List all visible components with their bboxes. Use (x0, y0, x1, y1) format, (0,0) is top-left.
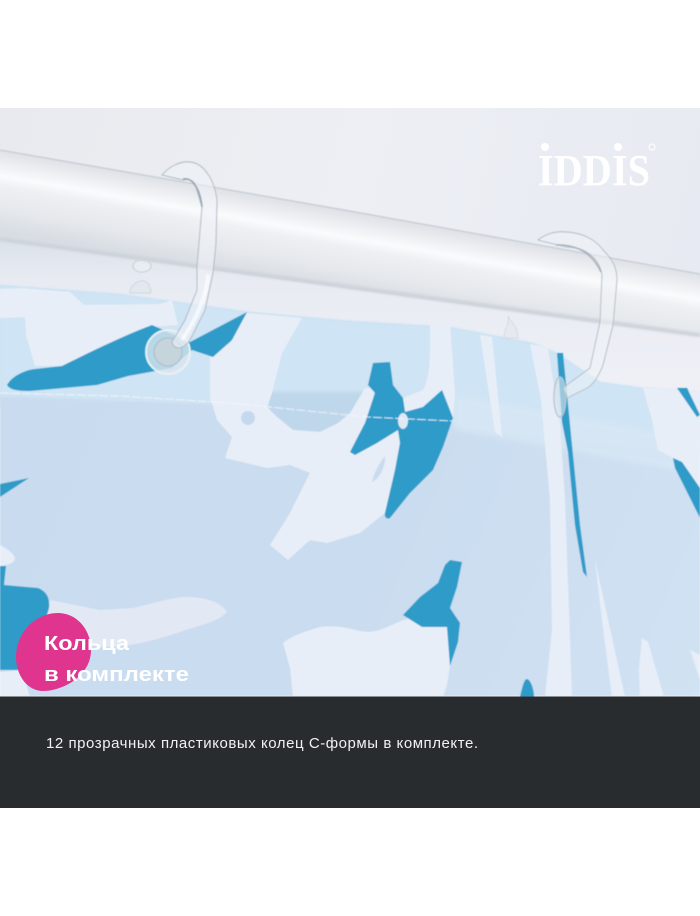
grommet (146, 330, 190, 374)
pale highlight inside butterfly (398, 413, 408, 429)
ring 2 grommet (554, 377, 566, 417)
product photo: curtain on rod (0, 108, 700, 697)
white curved band top centre (403, 323, 455, 418)
curtain fabric (0, 285, 700, 697)
clear ring 1 (146, 162, 217, 374)
upper right white area (643, 388, 700, 490)
vertical white stripe (530, 344, 572, 697)
darker hem blob (269, 392, 362, 431)
badge heading: Кольца (44, 633, 130, 655)
ring 2 inner shadow (556, 245, 601, 272)
small white shape left edge (0, 545, 15, 566)
fabric base (0, 285, 700, 696)
thin lower stripe (595, 560, 625, 697)
logo dots (541, 143, 549, 151)
caption text: 12 прозрачных пластиковых колец С-формы в комплекте. (46, 735, 478, 752)
shaded area under the rod (0, 242, 130, 262)
clear ring 2 (538, 232, 617, 417)
ring inner shadow (183, 179, 202, 207)
shower rod (0, 150, 700, 337)
teal patch lower left (0, 566, 49, 670)
narrow white stripe (480, 335, 502, 437)
registered mark (649, 144, 655, 150)
teal bottom stub (520, 679, 534, 697)
teal camouflage shapes (0, 312, 700, 697)
ring body (162, 162, 217, 348)
white camouflage shapes (0, 288, 700, 697)
badge heading: в комплекте (44, 664, 189, 686)
teal right edge (673, 458, 700, 518)
lower right white shape (639, 638, 664, 697)
white blob lower centre (283, 618, 453, 697)
caption bar background (0, 696, 700, 808)
logo wordmark: IDDIS (538, 146, 650, 195)
dark caption bar (0, 696, 700, 808)
upper lighter hem panel (4, 288, 614, 401)
teal patch lower centre (403, 560, 462, 666)
hem band right (458, 426, 646, 460)
logo (538, 143, 655, 195)
pale leaf inside white shape (372, 456, 385, 482)
white blob lower left (45, 597, 227, 647)
teal patch at ring (7, 312, 247, 391)
hook fragment under rod (504, 316, 518, 338)
teal sliver left edge (0, 478, 29, 497)
ring reflection (130, 260, 151, 293)
infographic canvas (0, 108, 700, 808)
white patch around centre (210, 313, 400, 560)
ring lower highlight (182, 275, 208, 340)
ring 2 body (538, 232, 617, 398)
thin teal stripe (557, 353, 587, 577)
stitch line (0, 393, 453, 421)
badge heading (44, 633, 189, 686)
rod bottom edge (0, 239, 700, 335)
white patch upper left (0, 288, 178, 366)
teal top right (677, 388, 700, 417)
rod body (0, 152, 700, 310)
pink badge blob (16, 613, 91, 691)
white corner lower left (0, 670, 30, 697)
pale dot (241, 411, 255, 425)
teal butterfly shape (350, 362, 453, 519)
rod top edge (0, 150, 700, 274)
wall backdrop (0, 108, 700, 274)
